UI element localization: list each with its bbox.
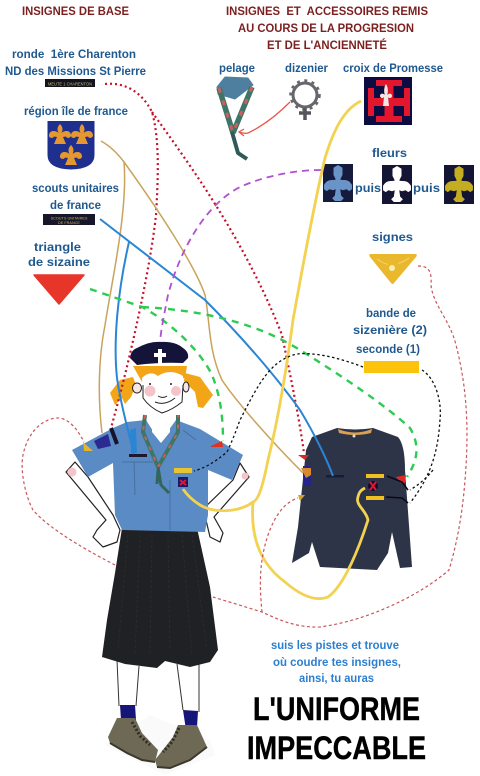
icon: yellow band — [364, 361, 419, 373]
label: signes: signes — [372, 230, 413, 244]
cheeks — [144, 386, 181, 396]
heading: insignes et accessoires remis: INSIGNES ET ACCESSOIRES REMIS — [226, 6, 428, 18]
label: scouts unitaires de france: scouts unitaires — [32, 181, 119, 195]
character: girl scout — [66, 342, 249, 775]
arrow: red dotted ronde paths — [105, 84, 304, 453]
icon: shield of Île-de-France — [48, 121, 94, 170]
label: triangle de sizaine: de sizaine — [28, 255, 90, 269]
face — [142, 372, 183, 413]
eyes and mouth — [149, 383, 175, 403]
icon: scouts unitaires badge — [43, 214, 95, 225]
caption: où coudre tes insignes, — [273, 655, 401, 669]
arrow: red line from dizenier — [239, 102, 290, 136]
label: ronde — [5, 47, 146, 78]
label: dizenier: dizenier — [285, 61, 328, 75]
arrow: black dotted band paths — [194, 354, 440, 503]
icon: red triangle — [34, 275, 84, 304]
title: L'UNIFORME — [253, 691, 420, 727]
arrow: purple dashed path — [160, 170, 321, 342]
socks — [120, 705, 198, 730]
icon: ronde badge: MEUTE 1 CHARENTON — [48, 82, 92, 86]
heading: insignes et accessoires remis: AU COURS DE LA PROGRESION — [238, 23, 414, 35]
icon: ronde badge — [45, 79, 95, 87]
ears — [132, 382, 189, 393]
shirt — [72, 420, 243, 532]
icon: signes triangle — [369, 254, 417, 284]
icon: white fleur — [382, 165, 412, 204]
shoes — [108, 718, 207, 768]
shirt badges — [83, 428, 223, 487]
label: bande de sizenière: bande de — [366, 306, 416, 320]
sweater — [292, 428, 412, 570]
icon: gold fleur — [444, 165, 474, 204]
label: croix de Promesse: croix de Promesse — [343, 61, 443, 75]
neck — [152, 410, 170, 443]
sweater badges — [298, 455, 408, 503]
label: puis: puis — [355, 181, 381, 195]
icon: dizenier cord — [290, 80, 320, 120]
arrow: yellow promise paths — [183, 101, 368, 599]
icon: pelage scarf — [217, 77, 253, 159]
arm blush — [68, 468, 248, 480]
shirt details — [122, 430, 196, 530]
label: triangle de sizaine — [28, 240, 90, 269]
icon: blue fleur — [323, 164, 353, 202]
arrow: blue paths — [100, 219, 333, 476]
caption — [271, 638, 401, 685]
neck scarf — [143, 415, 178, 493]
icon: scouts unitaires badge: DE FRANCE — [58, 221, 80, 225]
label: ronde: ND des Missions St Pierre — [5, 64, 146, 78]
label: bande de sizenière: sizenière (2) — [353, 323, 427, 337]
arrow: pink signes trail — [22, 266, 467, 627]
blue arrow tip on shirt — [130, 428, 137, 453]
heading: insignes de base: INSIGNES DE BASE — [22, 6, 129, 18]
caption: ainsi, tu auras — [299, 671, 374, 685]
label: région île de france: région île de france — [24, 104, 128, 118]
label: puis: puis — [413, 181, 440, 195]
icon: croix de Promesse — [364, 77, 412, 125]
hair — [110, 366, 213, 408]
label: scouts unitaires de france: de france — [50, 198, 101, 212]
label: ronde: ronde 1ère Charenton — [12, 47, 136, 61]
shorts — [102, 528, 218, 668]
label: triangle de sizaine: triangle — [34, 240, 81, 254]
arms — [66, 462, 249, 547]
legs — [117, 660, 199, 712]
heading: insignes et accessoires remis — [226, 6, 428, 52]
title — [247, 691, 426, 766]
arrow: tan paths — [99, 141, 303, 473]
label: bande de sizenière — [353, 306, 427, 356]
arrow: green dashed paths — [90, 289, 416, 477]
label: scouts unitaires de france — [32, 181, 119, 212]
heading: insignes et accessoires remis: ET DE L'ANCIENNETÉ — [267, 39, 387, 52]
shoe shadow — [105, 715, 215, 775]
beret fleur — [154, 349, 166, 364]
caption: suis les pistes et trouve — [271, 638, 399, 652]
beret — [130, 342, 188, 365]
label: pelage: pelage — [219, 61, 255, 75]
label: bande de sizenière: seconde (1) — [356, 342, 420, 356]
icon: scouts unitaires badge: SCOUTS UNITAIRES — [51, 216, 88, 220]
label: fleurs: fleurs — [372, 146, 407, 160]
title: IMPECCABLE — [247, 730, 426, 766]
shorts cord texture — [118, 535, 207, 655]
